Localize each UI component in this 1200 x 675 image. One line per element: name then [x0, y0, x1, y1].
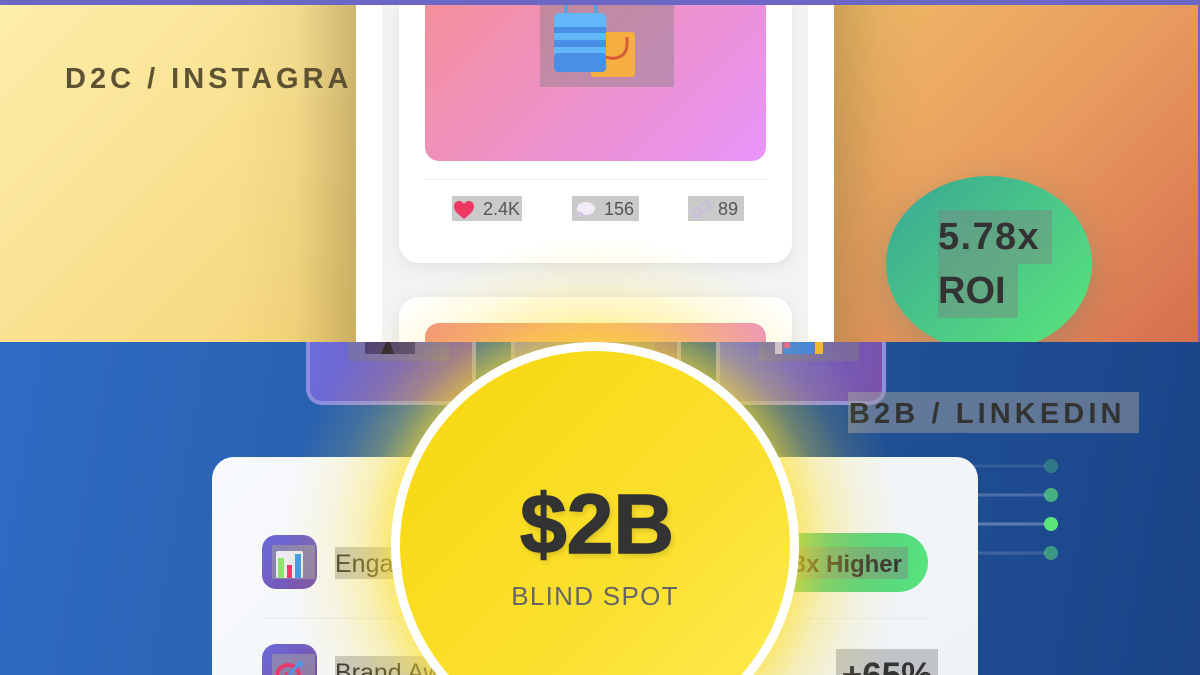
- stat: shares: [688, 196, 744, 221]
- bottom half: B2B / LinkedIn: [0, 342, 1200, 675]
- shadow cast by phone: [236, 5, 356, 342]
- target glyph: [276, 660, 303, 675]
- panel: comparison table: [212, 457, 978, 675]
- row 1 value: 3x Higher: [793, 551, 902, 578]
- panel: D2C left background: [0, 5, 356, 342]
- icon: link: [692, 201, 710, 218]
- image tile 1: [306, 342, 476, 405]
- divider: [425, 179, 766, 180]
- bar chart glyph: [276, 551, 303, 578]
- icon backdrop: [272, 654, 315, 675]
- top accent bar: [0, 0, 1200, 5]
- yellow glow around circle: [285, 236, 905, 675]
- tile icon backdrop: [553, 342, 654, 361]
- post image: coral gradient: [425, 323, 766, 342]
- stat: likes: 2.4K: [483, 199, 520, 219]
- caption: BLIND SPOT: [511, 581, 679, 611]
- stat: comments: [572, 196, 639, 221]
- row divider: [262, 618, 928, 619]
- stat: shares: 89: [718, 199, 738, 219]
- post card 1: [399, 5, 792, 263]
- stat: likes: [452, 196, 522, 221]
- ROI label highlight: [938, 264, 1018, 318]
- yellow disc: [400, 351, 790, 675]
- row 2 value: [836, 649, 938, 675]
- right accent strip: [1198, 0, 1200, 342]
- image tile 3: [716, 342, 886, 405]
- tile icon: briefcase: [758, 342, 859, 361]
- ROI value highlight: [938, 210, 1052, 264]
- row 1 icon: bar chart: [262, 535, 317, 589]
- phone column: [356, 5, 834, 342]
- image tile 2: [511, 342, 681, 405]
- panel: right orange background: [834, 5, 1198, 342]
- row 2 icon: target: [262, 644, 317, 675]
- icon: shopping bags: [540, 5, 674, 87]
- icon: speech bubble: [577, 202, 595, 217]
- phone feed background: [382, 5, 808, 342]
- icon backdrop: [272, 545, 315, 579]
- post card 2: [399, 297, 792, 342]
- post image: pink gradient: [425, 5, 766, 161]
- central $2B circle: [391, 342, 799, 675]
- stat: comments: 156: [604, 199, 634, 219]
- top half: D2C / Instagram: [0, 5, 1198, 342]
- ROI label highlight: ROI: [938, 270, 1006, 312]
- headline value: $2B: [520, 477, 674, 571]
- ROI badge: [886, 176, 1092, 352]
- icon: heart: [454, 201, 474, 219]
- ROI value highlight: 5.78x: [938, 216, 1040, 258]
- tile icon: dark figures: [348, 342, 449, 361]
- connector lines and dots: [972, 459, 1058, 560]
- row 1 value pill: [732, 533, 928, 592]
- shadow cast by phone: [834, 5, 924, 342]
- heading: B2B / LinkedIn: B2B / LINKEDIN: [849, 398, 1126, 430]
